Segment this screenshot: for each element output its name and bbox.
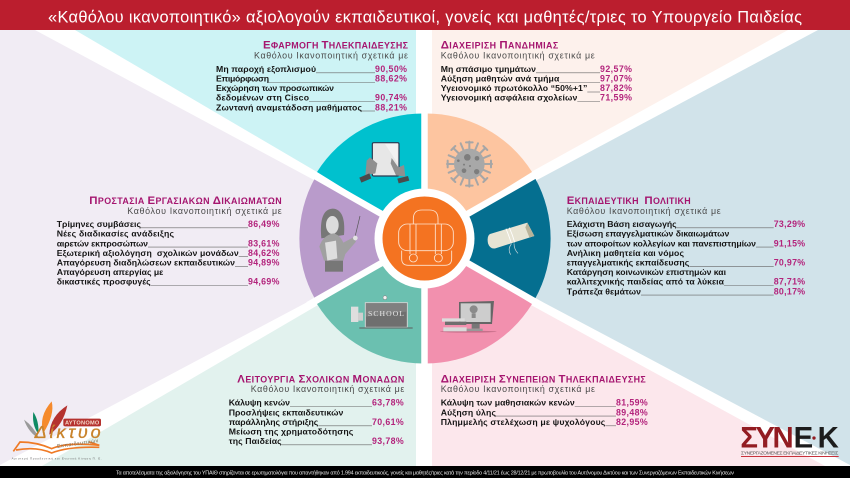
icon: tablet and hands: [359, 143, 409, 183]
panel: Διαχείριση Πανδημίας: [441, 40, 632, 103]
subtitle: Καθόλου Ικανοποιητική σχετικά με: [127, 206, 282, 216]
title bar: «Καθόλου ικανοποιητικό» αξιολογούν εκπαιδευτικοί, γονείς και μαθητές/τριες το Υπουργείο Παιδείας: [48, 8, 802, 26]
rows: 87,82%: [600, 83, 632, 93]
rows: παράλληλης στήριξης: [229, 417, 319, 427]
logo: Αυτόνομο Δίκτυο Εκπαιδευτικών: Εκπαιδευτικών: [57, 437, 99, 450]
rows: 70,61%: [372, 417, 404, 427]
rows: [229, 398, 404, 446]
wheel segment: purple: [299, 178, 424, 299]
wheel segment: pink: [424, 238, 532, 364]
logo: Αυτόνομο Δίκτυο Εκπαιδευτικών: ΑΥΤΟΝΟΜΟ: [65, 421, 100, 427]
rows: [567, 219, 805, 296]
rows: Τρίμηνες συμβάσεις: [57, 219, 141, 229]
icon: school blackboard: SCHOOL: [368, 309, 404, 318]
heading: ΕΚΠΑΙΔΕΥΤΙΚΗ ΠΟΛΙΤΙΚΗ: [567, 195, 691, 207]
logo: ΣΥΝΕΚ: Κ: [818, 421, 839, 454]
central wheel: [299, 105, 551, 372]
heading: ΕΦΑΡΜΟΓΗ ΤΗΛΕΚΠΑΙΔΕΥΣΗΣ: [263, 40, 409, 52]
panel: Διαχείριση Συνεπειών Τηλεκπαίδευσης: [441, 373, 648, 427]
rows: 70,97%: [774, 258, 805, 268]
rows: Κατάργηση κοινωνικών επιστημών και: [567, 267, 727, 277]
logo: Αυτόνομο Δίκτυο Εκπαιδευτικών: Αριστερή Προοδευτική και Ενωτική Κίνηση Π. Ε.: [12, 456, 102, 460]
rows: της Παιδείας: [229, 436, 282, 446]
rows: [441, 398, 648, 427]
rows: 90,74%: [375, 93, 407, 103]
rows: Απαγόρευση απεργίας με: [57, 267, 163, 277]
rows: Εξωτερική αξιολόγηση σχολικών μονάδων: [57, 248, 239, 258]
rows: 63,78%: [372, 398, 404, 408]
rows: Υγειονομικό πρωτόκολλο “50%+1”: [441, 83, 587, 93]
rows: Πλημμελής στελέχωση με ψυχολόγους: [441, 417, 606, 427]
rows: Ελάχιστη Βάση εισαγωγής: [567, 219, 677, 229]
logo: ΣΥΝΕΚ: Ε: [794, 421, 813, 454]
icon: school blackboard: [351, 296, 413, 328]
panel: Εφαρμογή Τηλεκπαίδευσης: [216, 40, 409, 112]
rows: 86,49%: [248, 219, 280, 229]
panel: Λειτουργία Σχολικών Μονάδων: [229, 373, 404, 446]
rows: [441, 64, 632, 103]
rows: 97,07%: [600, 74, 632, 84]
footer bar: [0, 466, 850, 478]
rows: 88,21%: [375, 102, 407, 112]
icon: virus: [447, 142, 492, 187]
rows: 73,29%: [774, 219, 805, 229]
rows: Κάλυψη κενών: [229, 398, 290, 408]
rows: Μείωση της χρηματοδότησης: [229, 426, 354, 436]
rows: 71,59%: [600, 93, 632, 103]
rows: 93,78%: [372, 436, 404, 446]
rows: των αποφοίτων κολλεγίων και πανεπιστημίων: [567, 238, 756, 248]
heading: ΔΙΑΧΕΙΡΙΣΗ ΣΥΝΕΠΕΙΩΝ ΤΗΛΕΚΠΑΙΔΕΥΣΗΣ: [441, 373, 646, 385]
rows: Απαγόρευση διαδηλώσεων εκπαιδευτικών: [57, 258, 235, 268]
rows: 80,17%: [774, 286, 805, 296]
logo: ΣΥΝΕΚ: ΣΥΝΕΡΓΑΖΟΜΕΝΕΣ ΕΚΠΑΙΔΕΥΤΙΚΕΣ ΚΙΝΗΣΕΙΣ: [741, 451, 838, 457]
subtitle: Καθόλου Ικανοποιητική σχετικά με: [254, 50, 408, 60]
rows: Αύξηση μαθητών ανά τμήμα: [441, 74, 560, 84]
subtitle: Καθόλου Ικανοποιητική σχετικά με: [251, 384, 404, 394]
icon: teacher: [319, 209, 360, 272]
heading: ΔΙΑΧΕΙΡΙΣΗ ΠΑΝΔΗΜΙΑΣ: [441, 40, 559, 52]
rows: Μη παροχή εξοπλισμού: [216, 64, 316, 74]
rows: Εκχώρηση των προσωπικών: [216, 83, 334, 93]
wheel segment: green: [317, 238, 424, 364]
rows: Ζωντανή αναμετάδοση μαθήματος: [216, 102, 362, 112]
heading: ΠΡΟΣΤΑΣΙΑ ΕΡΓΑΣΙΑΚΩΝ ΔΙΚΑΙΩΜΑΤΩΝ: [89, 195, 282, 207]
panel: Προστασία Εργασιακών Δικαιωμάτων: [57, 195, 282, 287]
rows: Προσλήψεις εκπαιδευτικών: [229, 407, 343, 417]
rows: 83,61%: [248, 238, 280, 248]
rows: 92,57%: [600, 64, 632, 74]
rows: δικαστικές προσφυγές: [57, 277, 151, 287]
rows: 87,71%: [774, 277, 805, 287]
rows: Επιμόρφωση: [216, 74, 269, 84]
wheel segment: peach: [424, 113, 532, 238]
title bar: [0, 0, 850, 30]
rows: 88,62%: [375, 74, 407, 84]
rows: Ανήλικη μαθητεία και νόμος: [567, 248, 684, 258]
rows: Κάλυψη των μαθησιακών κενών: [441, 398, 575, 408]
rows: Εξίσωση επαγγελματικών δικαιωμάτων: [567, 229, 729, 239]
rows: [57, 219, 280, 287]
icon: computer and books: [440, 301, 497, 333]
rows: 90,50%: [375, 64, 407, 74]
logo: Αυτόνομο Δίκτυο Εκπαιδευτικών: [12, 401, 102, 460]
wheel segment: teal: [317, 113, 424, 238]
rows: 84,62%: [248, 248, 280, 258]
rows: επαγγελματικής εκπαίδευσης: [567, 258, 690, 268]
rows: δεδομένων στη Cisco: [216, 93, 309, 103]
subtitle: Καθόλου Ικανοποιητική σχετικά με: [441, 384, 595, 394]
footer bar: Τα αποτελέσματα της αξιολόγησης του ΥΠΑΙΘ στηρίζονται σε ερωτηματολόγια που απαντήθηκαν από 1.994 εκπαιδευτικούς, γονείς και μαθητές/τριες κατά την περίοδο 4/11/21 έως 28/12/21 με πρωτοβουλία του Αυτόνομου Δικτύου και των Συνεργαζόμενων Εκπαιδευτικών Κινήσεων: [116, 470, 734, 476]
icon: school bag: [399, 210, 453, 265]
heading: ΛΕΙΤΟΥΡΓΙΑ ΣΧΟΛΙΚΩΝ ΜΟΝΑΔΩΝ: [237, 373, 404, 385]
wheel segment: dark blue: [424, 178, 551, 299]
rows: [216, 64, 407, 112]
rows: Αύξηση ύλης: [441, 407, 496, 417]
rows: καλλιτεχνικής παιδείας από τα λύκεια: [567, 277, 725, 287]
panel: Εκπαιδευτική Πολιτική: [567, 195, 805, 296]
logo: ΣΥΝΕΚ: ΣΥΝ: [740, 421, 794, 454]
icon: diploma scroll: [488, 223, 534, 255]
rows: αιρετών εκπροσώπων: [57, 238, 148, 248]
logo: ΣΥΝΕΚ: [740, 421, 839, 457]
rows: 82,95%: [616, 417, 648, 427]
rows: Υγειονομική ασφάλεια σχολείων: [441, 93, 577, 103]
subtitle: Καθόλου Ικανοποιητική σχετικά με: [441, 50, 595, 60]
rows: 94,69%: [248, 277, 280, 287]
rows: 89,48%: [616, 407, 648, 417]
rows: Νέες διαδικασίες ανάδειξης: [57, 229, 174, 239]
rows: 91,15%: [774, 238, 805, 248]
rows: 81,59%: [616, 398, 648, 408]
subtitle: Καθόλου Ικανοποιητική σχετικά με: [567, 206, 721, 216]
logo: Αυτόνομο Δίκτυο Εκπαιδευτικών: Δίκτυο: [34, 422, 101, 442]
rows: Μη σπάσιμο τμημάτων: [441, 64, 536, 74]
rows: Τράπεζα θεμάτων: [567, 286, 641, 296]
rows: 94,89%: [248, 258, 280, 268]
